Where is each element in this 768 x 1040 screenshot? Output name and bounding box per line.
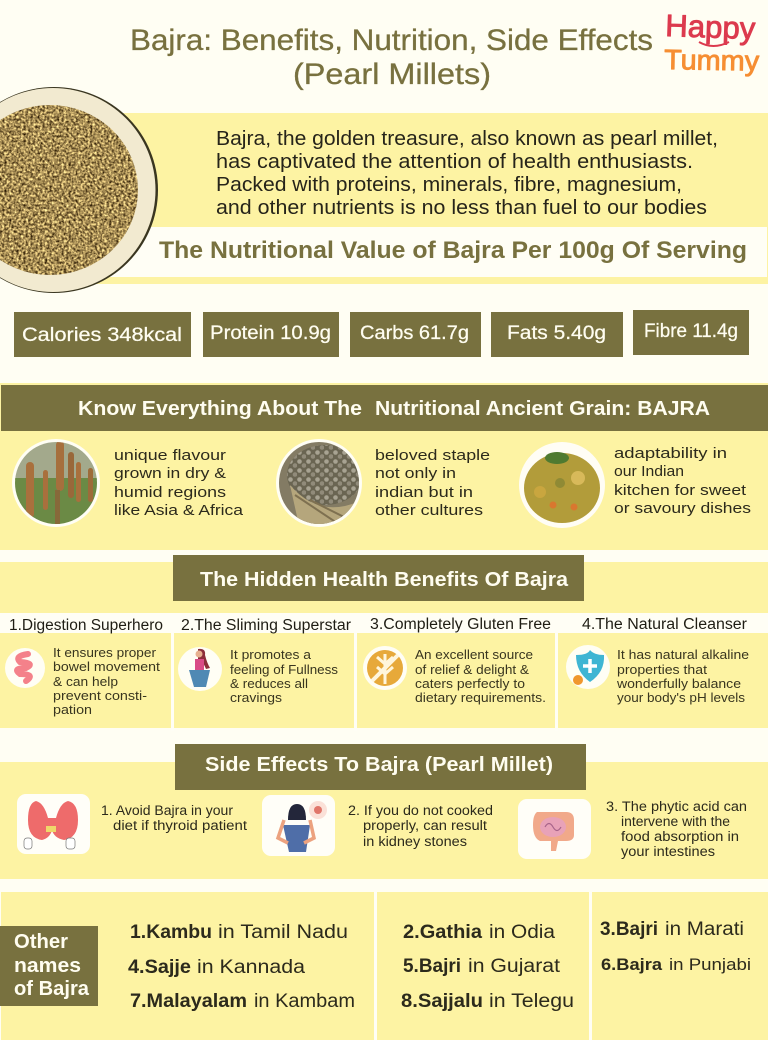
icon: slim woman: [178, 647, 222, 691]
text: kidney stones: 2. If you do not cooked: [348, 803, 493, 818]
benefit 1: digestion: bowel movement: [53, 659, 160, 674]
benefit 4: cleanser: properties that: [617, 662, 707, 677]
image: basket of millet: [276, 439, 363, 530]
text: adaptability: or savoury dishes: [614, 500, 751, 517]
icon: intestines: [518, 799, 591, 859]
stat: carbs: [350, 312, 481, 357]
benefit 4: cleanser: wonderfully balance: [616, 676, 741, 691]
heading: know everything: [1, 385, 768, 431]
panel: intro: [60, 113, 768, 284]
names column 3: 6.Bajra: [601, 955, 663, 974]
names column 1: in Kambam: [254, 991, 355, 1012]
icon: gluten free: [363, 646, 407, 690]
benefit 1: digestion: & can help: [53, 674, 118, 689]
text: kidney stones: [348, 803, 493, 849]
text: beloved staple: not only in: [375, 465, 456, 482]
names column 2: 5.Bajri: [403, 956, 461, 977]
heading: health benefits: The Hidden Health Benefits Of Bajra: [200, 569, 569, 591]
benefit 2: sliming: feeling of Fullness: [230, 662, 339, 677]
heading band: nutritional value: The Nutritional Value of Bajra Per 100g Of Serving: [159, 237, 747, 264]
image: bowl of bajra: [0, 87, 158, 293]
text: beloved staple: [375, 447, 490, 519]
benefit 2: sliming: 2.The Sliming Superstar: [181, 617, 351, 634]
stat: protein: [203, 312, 339, 357]
names column 3: [600, 919, 751, 974]
names column 2: in Odia: [489, 922, 555, 943]
stat: carbs: Carbs 61.7g: [360, 323, 469, 344]
dividers: [374, 892, 592, 1040]
benefit 4: cleanser: [566, 616, 749, 705]
title: Bajra: Benefits, Nutrition, Side Effects: [130, 24, 653, 57]
text: phytic acid: food absorption in: [621, 829, 739, 844]
text: avoid bajra: diet if thyroid patient: [113, 818, 247, 833]
benefit 1: digestion: [5, 617, 163, 717]
names column 2: in Gujarat: [468, 956, 561, 977]
benefit 3: gluten free: An excellent source: [415, 647, 533, 662]
label: other names of bajra: Other: [14, 931, 68, 953]
names column 3: 3.Bajri: [600, 919, 658, 940]
names column 3: in Punjabi: [669, 955, 751, 974]
benefit 4: cleanser: It has natural alkaline: [617, 647, 749, 662]
text: kidney stones: in kidney stones: [363, 834, 467, 849]
icon: intestine: [5, 648, 45, 688]
names column 1: 7.Malayalam: [130, 991, 247, 1012]
text: kidney stones: properly, can result: [363, 818, 487, 833]
names column 1: in Kannada: [197, 957, 305, 978]
icon: thyroid: [17, 794, 90, 854]
benefit 1: digestion: 1.Digestion Superhero: [9, 617, 163, 634]
text: unique flavour: like Asia & Africa: [114, 502, 244, 519]
panel: side effects: [0, 744, 768, 879]
logo: Happy Tummy: [664, 8, 759, 77]
benefit 3: gluten free: 3.Completely Gluten Free: [370, 616, 551, 633]
benefit 3: gluten free: dietary requirements.: [415, 690, 546, 705]
benefit 4: cleanser: your body's pH levels: [617, 690, 746, 705]
benefit 2: sliming: cravings: [230, 690, 283, 705]
benefit 2: sliming: & reduces all: [230, 676, 308, 691]
intro text: Packed with proteins, minerals, fibre, magnesium,: [216, 174, 682, 196]
intro text: and other nutrients is no less than fuel to our bodies: [216, 197, 707, 219]
names column 1: in Tamil Nadu: [218, 922, 348, 943]
names column 2: in Telegu: [489, 991, 574, 1012]
benefit 3: gluten free: caters perfectly to: [415, 676, 525, 691]
names column 2: 8.Sajjalu: [401, 991, 483, 1012]
benefit 3: gluten free: [363, 616, 551, 705]
stat: calories: Calories 348kcal: [22, 325, 182, 346]
text: unique flavour: [114, 447, 244, 519]
names column 2: 2.Gathia: [403, 922, 482, 943]
benefit 2: sliming: [178, 617, 351, 705]
benefit 2: sliming: It promotes a: [230, 647, 312, 662]
heading: know everything: Know Everything About The: [78, 398, 362, 420]
label: other names of bajra: names: [14, 955, 81, 977]
title: (Pearl Millets): [293, 58, 491, 91]
names column 3: in Marati: [665, 919, 744, 940]
text: phytic acid: intervene with the: [621, 814, 730, 829]
text: unique flavour: humid regions: [114, 484, 226, 501]
text: phytic acid: 3. The phytic acid can: [606, 799, 747, 814]
heading: side effects: [175, 744, 586, 790]
text: unique flavour: unique flavour: [114, 447, 226, 464]
icon: kidney pain: [262, 795, 335, 856]
benefit 1: digestion: pation: [53, 702, 92, 717]
dividers: [171, 613, 558, 731]
white title strip: [0, 613, 768, 633]
heading: know everything: Nutritional Ancient Grain: BAJRA: [375, 398, 710, 420]
intro text: [216, 128, 718, 219]
heading band: nutritional value: [110, 227, 767, 277]
intro text: has captivated the attention of health enthusiasts.: [216, 151, 693, 173]
stat: protein: Protein 10.9g: [210, 323, 331, 344]
intro text: Bajra, the golden treasure, also known as pearl millet,: [216, 128, 718, 150]
label: other names of bajra: of Bajra: [14, 978, 90, 1000]
stat: calories: [14, 312, 191, 357]
text: adaptability: adaptability in: [614, 445, 727, 462]
benefit 4: cleanser: 4.The Natural Cleanser: [582, 616, 747, 633]
text: beloved staple: other cultures: [375, 502, 483, 519]
text: beloved staple: indian but in: [375, 484, 473, 501]
benefit 1: digestion: prevent consti-: [53, 688, 147, 703]
text: adaptability: our Indian: [614, 463, 684, 480]
image: bajra dish: [519, 442, 605, 528]
stat: fibre: Fibre 11.4g: [644, 321, 738, 342]
panel: health benefits: [0, 555, 768, 731]
title: [130, 24, 653, 91]
stat: fats: Fats 5.40g: [507, 323, 606, 344]
heading: health benefits: [173, 555, 584, 601]
heading: side effects: Side Effects To Bajra (Pearl Millet): [205, 754, 553, 776]
text: phytic acid: your intestines: [621, 844, 715, 859]
text: adaptability: [614, 445, 751, 517]
stat: fats: [491, 312, 623, 357]
benefit 1: digestion: It ensures proper: [53, 645, 157, 660]
text: avoid bajra: 1. Avoid Bajra in your: [101, 803, 234, 818]
image: millet field: [12, 439, 100, 528]
benefit 3: gluten free: of relief & delight &: [415, 662, 529, 677]
icon: shield: [566, 645, 610, 689]
text: unique flavour: grown in dry &: [114, 465, 226, 482]
logo: Happy Tummy: Tummy: [664, 44, 759, 77]
names column 1: 1.Kambu: [130, 922, 212, 943]
text: phytic acid: [606, 799, 747, 859]
logo: Happy Tummy: Happy: [665, 8, 756, 46]
text: avoid bajra: [101, 803, 247, 833]
names column 1: 4.Sajje: [128, 957, 191, 978]
stat: fibre: [633, 310, 749, 355]
text: adaptability: kitchen for sweet: [614, 482, 747, 499]
names column 2: [401, 922, 574, 1012]
text: beloved staple: beloved staple: [375, 447, 490, 464]
panel: know everything: [0, 383, 768, 550]
names column 1: [128, 922, 355, 1012]
panel: other names: [0, 892, 768, 1040]
label: other names of bajra: [0, 926, 98, 1006]
